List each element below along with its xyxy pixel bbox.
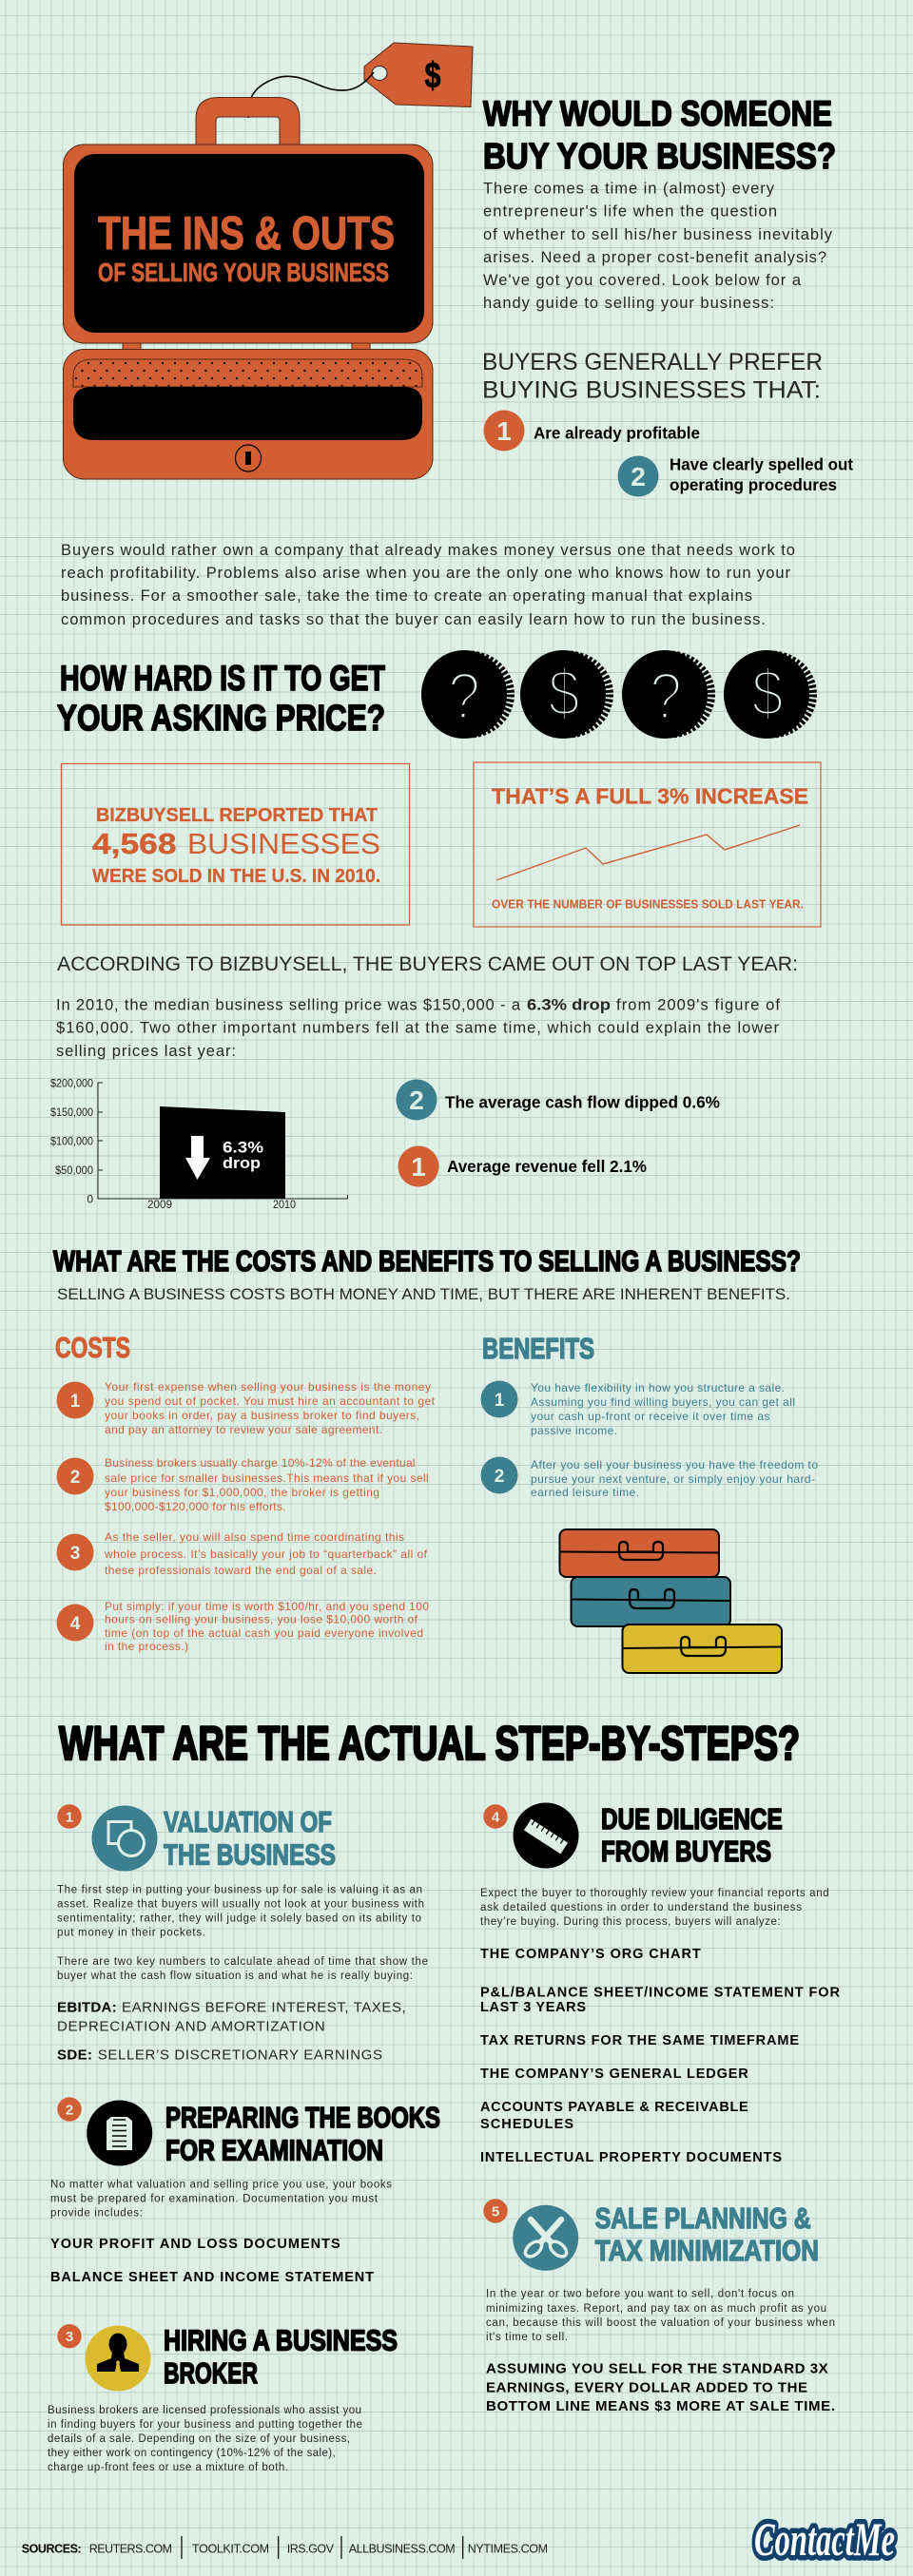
step 3 title bbox=[164, 2324, 398, 2390]
cost 1: you spend out of pocket. You must hire an accountant to get bbox=[105, 1394, 436, 1408]
definitions: EARNINGS BEFORE INTEREST, TAXES, bbox=[122, 2000, 406, 2016]
step 2 text: No matter what valuation and selling price you use, your books bbox=[50, 2180, 392, 2191]
text block: median selling price: In 2010, the median business selling price was $150,000 - a bbox=[56, 997, 521, 1014]
panel: 3% increase bbox=[474, 762, 821, 927]
sources: ALLBUSINESS.COM bbox=[349, 2543, 456, 2556]
black trackpad panel bbox=[73, 387, 422, 440]
item: revenue: 1 bbox=[411, 1152, 426, 1182]
cost 1: and pay an attorney to review your sale agreement. bbox=[105, 1423, 382, 1436]
step 2 title bbox=[165, 2101, 440, 2167]
benefit 2 bbox=[481, 1456, 818, 1499]
dotted keyboard strip bbox=[73, 359, 422, 387]
step 1 title: VALUATION OF bbox=[164, 1805, 332, 1838]
text block: intro: We've got you covered. Look below for a bbox=[483, 272, 802, 289]
benefit 1: Assuming you find willing buyers, you can get all bbox=[531, 1395, 795, 1409]
documents list bbox=[50, 2237, 374, 2285]
step 1 text: buyer what the cash flow situation is and what he is really buying: bbox=[57, 1970, 413, 1982]
sources: REUTERS.COM bbox=[89, 2543, 172, 2556]
cost 4: Put simply: if your time is worth $100/hr, and you spend 100 bbox=[105, 1600, 429, 1613]
illustration: stacked suitcases bbox=[559, 1529, 782, 1673]
screen title bbox=[98, 208, 395, 287]
benefit 1: passive income. bbox=[531, 1424, 617, 1437]
step 4: due diligence bbox=[480, 1802, 841, 2165]
step 5: sale planning bbox=[483, 2199, 835, 2414]
analysis list: P&L/BALANCE SHEET/INCOME STATEMENT FOR bbox=[480, 1986, 841, 2001]
step 5 text: can, because this will boost the valuation of your business when bbox=[486, 2317, 835, 2329]
item: cash flow: 2 bbox=[409, 1086, 424, 1115]
coin dollar 1: $ bbox=[548, 656, 580, 730]
heading: why would someone buy: BUY YOUR BUSINESS? bbox=[483, 137, 836, 177]
benefit 1 bbox=[481, 1380, 795, 1437]
y axis labels bbox=[50, 1076, 93, 1205]
text block: buyers paragraph: common procedures and tasks so that the buyer can easily learn how to run the business. bbox=[61, 611, 766, 628]
callout: 3x earnings: ASSUMING YOU SELL FOR THE STANDARD 3X bbox=[486, 2361, 828, 2377]
cost 1: your books in order, pay a business broker to find buyers, bbox=[105, 1409, 419, 1422]
step 3 text bbox=[48, 2405, 362, 2473]
cost 4: 4 bbox=[70, 1614, 81, 1634]
icon: price tag bbox=[364, 43, 473, 106]
heading: according to bizbuysell: ACCORDING TO BIZBUYSELL, THE BUYERS CAME OUT ON TOP LAST YEAR: bbox=[57, 953, 798, 975]
costs heading: COSTS bbox=[55, 1331, 130, 1364]
cost 2: sale price for smaller businesses.This means that if you sell bbox=[105, 1471, 429, 1485]
step 3 text: in finding buyers for your business and putting together the bbox=[48, 2419, 362, 2431]
step 4 title: FROM BUYERS bbox=[601, 1835, 771, 1868]
coin question 1 bbox=[421, 650, 511, 739]
step 1 title: THE BUSINESS bbox=[164, 1838, 336, 1872]
benefits heading: BENEFITS bbox=[482, 1332, 594, 1365]
analysis list: ACCOUNTS PAYABLE & RECEIVABLE bbox=[480, 2100, 748, 2115]
text block: intro bbox=[483, 181, 833, 312]
y axis labels: $100,000 bbox=[50, 1135, 93, 1148]
definitions bbox=[57, 2000, 406, 2064]
benefit 1: 1 bbox=[495, 1391, 505, 1411]
step 5 text bbox=[486, 2289, 835, 2343]
cost 4: time (on top of the actual cash you paid everyone involved bbox=[105, 1626, 423, 1640]
cost 4: hours on selling your business, you lose $10,000 worth of bbox=[105, 1612, 418, 1625]
badge 1: 1 bbox=[66, 1810, 73, 1825]
cost 1: Your first expense when selling your business is the money bbox=[105, 1380, 431, 1394]
icon: scissors bbox=[513, 2205, 578, 2271]
item: cash flow: The average cash flow dipped 0.6% bbox=[445, 1093, 720, 1112]
benefit 2: pursue your next venture, or simply enjoy your hard- bbox=[531, 1472, 815, 1486]
text block: intro: There comes a time in (almost) every bbox=[483, 181, 775, 198]
panel: businesses sold bbox=[61, 764, 409, 925]
panel: businesses sold: WERE SOLD IN THE U.S. IN 2010. bbox=[92, 866, 380, 887]
suitcase orange bbox=[559, 1529, 719, 1577]
x axis labels bbox=[147, 1198, 296, 1211]
coin question 1: ? bbox=[448, 659, 480, 733]
step 2 text: provide includes: bbox=[50, 2208, 143, 2220]
text block: intro: handy guide to selling your business: bbox=[483, 295, 774, 312]
icon: person bbox=[86, 2325, 150, 2392]
step 2 title: PREPARING THE BOOKS bbox=[165, 2101, 440, 2134]
tag string bbox=[248, 72, 374, 118]
item 2: operating procedures: 2 bbox=[631, 462, 646, 491]
subheading: buyers prefer: BUYING BUSINESSES THAT: bbox=[482, 376, 821, 403]
step 1 text: There are two key numbers to calculate ahead of time that show the bbox=[57, 1956, 428, 1968]
hinges bbox=[123, 342, 370, 351]
step 4 text: ask detailed questions in order to understand the business bbox=[480, 1902, 802, 1913]
icon: shapes bbox=[91, 1806, 158, 1871]
panel: businesses sold: BUSINESSES bbox=[187, 827, 380, 860]
text block: median selling price bbox=[56, 997, 780, 1060]
cost 3: 3 bbox=[70, 1544, 80, 1564]
step 3 text: Business brokers are licensed professionals who assist you bbox=[48, 2405, 361, 2416]
badge 5: 5 bbox=[492, 2203, 499, 2220]
subheading: buyers prefer bbox=[482, 349, 823, 403]
text block: intro: arises. Need a proper cost-benefit analysis? bbox=[483, 249, 826, 266]
text block: buyers paragraph bbox=[61, 542, 795, 628]
item 2: operating procedures: operating procedures bbox=[670, 475, 837, 494]
callout: 3x earnings: BOTTOM LINE MEANS $3 MORE AT SALE TIME. bbox=[486, 2398, 835, 2414]
coin dollar 2: $ bbox=[751, 656, 784, 730]
panel: businesses sold: BIZBUYSELL REPORTED THAT bbox=[96, 805, 378, 826]
step 2 text bbox=[50, 2180, 392, 2220]
arrow: down bbox=[185, 1136, 210, 1180]
panel: 3% increase: OVER THE NUMBER OF BUSINESSES SOLD LAST YEAR. bbox=[492, 898, 804, 912]
benefit 2: earned leisure time. bbox=[531, 1486, 639, 1499]
illustration: briefcase laptop with price tag bbox=[63, 43, 473, 479]
item: cash flow bbox=[396, 1080, 720, 1120]
step 4 text: they’re buying. During this process, buyers will analyze: bbox=[480, 1916, 781, 1928]
drop label: 6.3% bbox=[223, 1139, 263, 1157]
suitcase teal bbox=[571, 1577, 730, 1626]
panel: benefits bbox=[481, 1332, 818, 1499]
icons: coins bbox=[421, 650, 813, 739]
step 1 text: asset. Realize that buyers will usually not look at your business with bbox=[57, 1899, 424, 1911]
cost 3 bbox=[57, 1530, 428, 1577]
item 2: operating procedures bbox=[618, 454, 853, 496]
briefcase handle bbox=[196, 97, 300, 144]
icon: price tag: $ bbox=[424, 56, 441, 96]
step 5 title bbox=[595, 2201, 819, 2267]
step 5 text: it's time to sell. bbox=[486, 2332, 568, 2343]
sources bbox=[22, 2536, 548, 2559]
sources: SOURCES: bbox=[22, 2543, 82, 2556]
analysis list: THE COMPANY’S ORG CHART bbox=[480, 1947, 701, 1962]
panel: businesses sold: 4,568 bbox=[92, 827, 177, 860]
bottom case bbox=[63, 350, 433, 479]
badge 3 bbox=[57, 2324, 82, 2348]
step 5 text: minimizing taxes. Report, and pay tax on as much profit as you bbox=[486, 2303, 826, 2315]
cost 1: 1 bbox=[70, 1392, 81, 1412]
sources: IRS.GOV bbox=[287, 2543, 335, 2556]
text block: intro: entrepreneur's life when the question bbox=[483, 203, 777, 221]
heading: how hard: HOW HARD IS IT TO GET bbox=[60, 659, 385, 698]
y axis labels: 0 bbox=[87, 1192, 93, 1205]
step 1 text: sentimentality; rather, they will judge it solely based on its ability to bbox=[57, 1913, 421, 1925]
item: revenue bbox=[398, 1146, 647, 1186]
analysis list: LAST 3 YEARS bbox=[480, 2000, 586, 2015]
step 4 text: Expect the buyer to thoroughly review your financial reports and bbox=[480, 1888, 829, 1899]
step 1 text: The first step in putting your business up for sale is valuing it as an bbox=[57, 1885, 422, 1896]
step 3 text: details of a sale. Depending on the size of your business, bbox=[48, 2433, 350, 2445]
definitions: DEPRECIATION AND AMORTIZATION bbox=[57, 2019, 325, 2035]
item 2: operating procedures: Have clearly spelled out bbox=[670, 454, 853, 473]
badge 2 bbox=[57, 2097, 82, 2122]
text block: median selling price: from 2009's figure of bbox=[616, 997, 780, 1014]
cost 2: 2 bbox=[70, 1468, 80, 1488]
step 4 title bbox=[601, 1802, 783, 1868]
coin dollar 1 bbox=[520, 650, 610, 739]
icon: clipboard bbox=[87, 2101, 152, 2165]
screen title: OF SELLING YOUR BUSINESS bbox=[98, 258, 389, 287]
screen title: THE INS & OUTS bbox=[98, 208, 395, 260]
analysis list: SCHEDULES bbox=[480, 2117, 573, 2132]
y axis labels: $200,000 bbox=[50, 1076, 93, 1089]
step 5 title: SALE PLANNING & bbox=[595, 2201, 811, 2235]
analysis list: THE COMPANY’S GENERAL LEDGER bbox=[480, 2067, 748, 2082]
step 3 title: BROKER bbox=[164, 2356, 258, 2390]
step 4 text bbox=[480, 1888, 829, 1928]
text block: buyers paragraph: reach profitability. Problems also arise when you are the only one who knows how to run your bbox=[61, 565, 791, 582]
heading: why would someone buy bbox=[483, 94, 836, 177]
step 3 title: HIRING A BUSINESS bbox=[164, 2324, 398, 2357]
cost 3: these professionals toward the end goal of a sale. bbox=[105, 1564, 377, 1577]
step 1 text: put money in their pockets. bbox=[57, 1928, 205, 1939]
benefit 1: your cash up-front or receive it over time as bbox=[531, 1410, 770, 1423]
step 5 title: TAX MINIMIZATION bbox=[595, 2234, 819, 2267]
step 3 text: charge up-front fees or use a mixture of both. bbox=[48, 2462, 288, 2473]
badge 4 bbox=[483, 1804, 508, 1829]
step 2: books bbox=[50, 2097, 440, 2285]
step 5 text: In the year or two before you want to sell, don't focus on bbox=[486, 2289, 794, 2300]
badge 1 bbox=[57, 1804, 82, 1829]
y axis labels: $150,000 bbox=[50, 1105, 93, 1119]
benefit 1: You have flexibility in how you structure a sale. bbox=[531, 1381, 785, 1394]
y axis labels: $50,000 bbox=[55, 1163, 93, 1177]
coin dollar 2 bbox=[724, 650, 813, 739]
step 1 title bbox=[164, 1805, 336, 1872]
coin question 2 bbox=[622, 650, 711, 739]
lock bbox=[236, 445, 261, 471]
badge 2: 2 bbox=[66, 2103, 73, 2118]
line chart bbox=[496, 825, 800, 880]
analysis list: INTELLECTUAL PROPERTY DOCUMENTS bbox=[480, 2150, 782, 2165]
sources: NYTIMES.COM bbox=[468, 2543, 548, 2556]
cost 1 bbox=[57, 1380, 436, 1436]
panel: 3% increase: THAT’S A FULL 3% INCREASE bbox=[492, 784, 808, 809]
text block: median selling price: 6.3% drop bbox=[527, 997, 611, 1014]
definitions: EBITDA: bbox=[57, 2000, 117, 2016]
coin question 2: ? bbox=[650, 659, 682, 733]
step 1: valuation bbox=[57, 1804, 428, 2064]
text block: intro: of whether to sell his/her business inevitably bbox=[483, 226, 833, 243]
documents list: BALANCE SHEET AND INCOME STATEMENT bbox=[50, 2270, 374, 2285]
black screen bbox=[74, 154, 424, 333]
black area bbox=[160, 1106, 285, 1199]
heading: how hard bbox=[57, 659, 385, 739]
analysis list bbox=[480, 1947, 841, 2165]
text block: buyers paragraph: Buyers would rather own a company that already makes money versus one that needs work to bbox=[61, 542, 795, 559]
cost 4: in the process.) bbox=[105, 1640, 188, 1653]
icon: ruler bbox=[514, 1802, 578, 1869]
item 1: profitable bbox=[483, 411, 700, 451]
item: revenue: Average revenue fell 2.1% bbox=[447, 1157, 647, 1176]
x axis labels: 2009 bbox=[147, 1198, 172, 1211]
callout: 3x earnings: EARNINGS, EVERY DOLLAR ADDED TO THE bbox=[486, 2380, 807, 2396]
item 1: profitable: Are already profitable bbox=[534, 424, 700, 443]
step 3 text: they either work on contingency (10%-12% of the sale), bbox=[48, 2448, 336, 2459]
analysis list: TAX RETURNS FOR THE SAME TIMEFRAME bbox=[480, 2033, 799, 2048]
documents list: YOUR PROFIT AND LOSS DOCUMENTS bbox=[50, 2237, 340, 2252]
cost 3: whole process. It’s basically your job to “quarterback” all of bbox=[104, 1548, 428, 1561]
drop label bbox=[223, 1139, 263, 1172]
subheading: costs and benefits: SELLING A BUSINESS COSTS BOTH MONEY AND TIME, BUT THERE ARE INHERENT BENEFITS. bbox=[57, 1285, 790, 1303]
drop label: drop bbox=[223, 1154, 261, 1172]
heading: why would someone buy: WHY WOULD SOMEONE bbox=[483, 94, 832, 133]
cost 3: As the seller, you will also spend time coordinating this bbox=[105, 1530, 404, 1544]
text block: buyers paragraph: business. For a smoother sale, take the time to create an operating manual that explains bbox=[61, 587, 752, 605]
x axis labels: 2010 bbox=[273, 1198, 296, 1211]
panel: costs bbox=[55, 1331, 436, 1653]
cost 2: Business brokers usually charge 10%-12% of the eventual bbox=[105, 1456, 416, 1470]
step 1 text bbox=[57, 1885, 428, 1982]
badge 5 bbox=[483, 2199, 508, 2223]
badge 3: 3 bbox=[66, 2329, 73, 2345]
step 4 title: DUE DILIGENCE bbox=[601, 1802, 783, 1836]
badge 4: 4 bbox=[492, 1810, 500, 1825]
definitions: SDE: bbox=[57, 2047, 92, 2064]
chart: median price bbox=[50, 1076, 348, 1211]
benefit 2: 2 bbox=[495, 1467, 504, 1487]
cost 2: $100,000-$120,000 for his efforts. bbox=[105, 1500, 286, 1513]
heading: how hard: YOUR ASKING PRICE? bbox=[57, 699, 385, 739]
step 3: broker bbox=[48, 2324, 398, 2473]
callout: 3x earnings bbox=[486, 2361, 835, 2414]
cost 2 bbox=[57, 1456, 429, 1513]
subheading: buyers prefer: BUYERS GENERALLY PREFER bbox=[482, 349, 823, 375]
definitions: SELLER’S DISCRETIONARY EARNINGS bbox=[98, 2047, 382, 2064]
top case bbox=[63, 144, 433, 343]
text block: median selling price: $160,000. Two other important numbers fell at the same time, which could explain the lower bbox=[56, 1020, 780, 1037]
sources: TOOLKIT.COM bbox=[192, 2543, 269, 2556]
step 2 text: must be prepared for examination. Documentation you must bbox=[50, 2194, 379, 2205]
item 1: profitable: 1 bbox=[496, 416, 512, 446]
step 2 title: FOR EXAMINATION bbox=[165, 2134, 383, 2167]
suitcase yellow bbox=[622, 1624, 782, 1673]
text block: median selling price: selling prices last year: bbox=[56, 1043, 236, 1060]
benefit 2: After you sell your business you have the freedom to bbox=[531, 1458, 818, 1471]
cost 4 bbox=[57, 1600, 429, 1653]
cost 2: your business for $1,000,000, the broker is getting bbox=[105, 1486, 379, 1499]
